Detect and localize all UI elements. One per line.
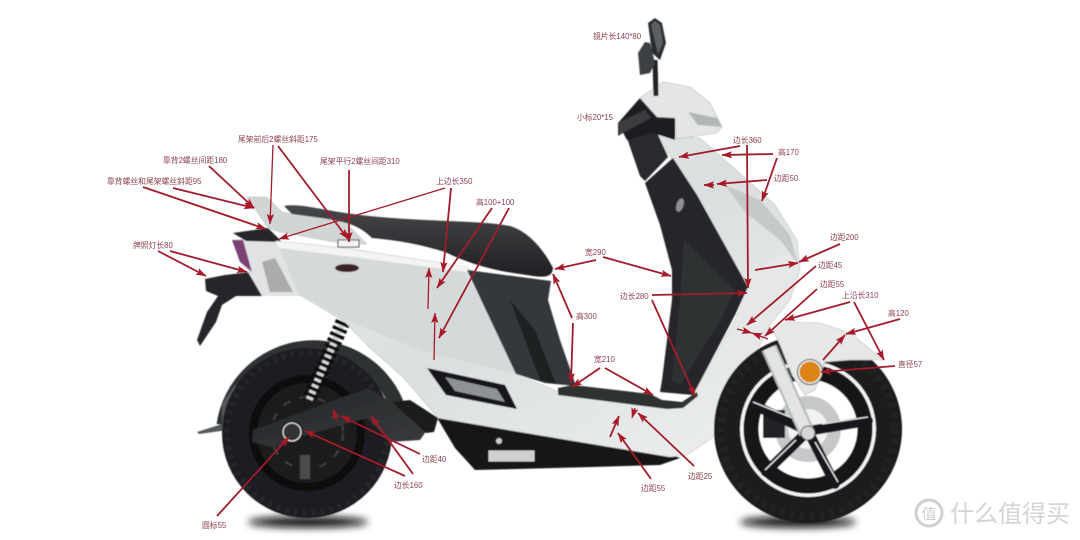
front shield shading <box>724 250 798 400</box>
handlebar head cover <box>640 82 722 139</box>
callout: 边距45 <box>737 261 843 333</box>
swing arm badge <box>281 421 303 443</box>
callout: 边距55 bottom <box>610 416 666 493</box>
callout: 边距55 right <box>752 280 845 339</box>
swing arm <box>252 388 427 448</box>
scooter illustration <box>197 18 902 528</box>
main white body <box>277 135 800 457</box>
callout: 边长160: 边长160 <box>394 480 423 490</box>
rear grab rail <box>247 197 367 244</box>
callout: 高100+100 <box>428 197 515 360</box>
callout: 高100+100: 高100+100 <box>476 197 515 207</box>
upper glove box <box>627 128 668 181</box>
callout: 边距45: 边距45 <box>818 261 843 270</box>
callout: 尾架平行2螺丝间距310: 尾架平行2螺丝间距310 <box>320 156 400 166</box>
callout: 上沿长310: 上沿长310 <box>842 290 879 300</box>
watermark: 值 <box>921 506 937 523</box>
callout: 高300: 高300 <box>576 311 597 321</box>
callout: 圆标55: 圆标55 <box>202 520 227 530</box>
orange reflector <box>798 360 822 384</box>
callout: 镜片长140*80: 镜片长140*80 <box>593 31 642 41</box>
callout: 边距200 <box>755 233 859 270</box>
callout: 宽290: 宽290 <box>585 247 606 257</box>
motor cover <box>392 400 438 433</box>
callout: 高170 <box>722 147 799 201</box>
callout: 牌照灯长80 <box>133 240 247 276</box>
body highlight strip <box>275 241 468 272</box>
callout: 边长160 <box>305 416 423 490</box>
mirrors <box>638 18 666 96</box>
callout: 尾架前后2螺丝斜距175 <box>238 134 348 239</box>
lower black underbody <box>436 416 680 470</box>
rack badge <box>338 240 359 247</box>
callout: 边长360: 边长360 <box>733 135 762 145</box>
callout: 上沿长310 <box>785 290 884 360</box>
callout: 上边长350 <box>279 176 473 272</box>
callout: 高120: 高120 <box>888 308 909 318</box>
dark under-seat strut <box>467 270 576 386</box>
leg shield dark panel <box>645 158 748 395</box>
callout: 上边长350: 上边长350 <box>436 176 473 186</box>
headlight strip <box>688 112 722 127</box>
callout: 直径57 <box>821 359 922 372</box>
callout: 高170: 高170 <box>778 147 799 157</box>
seat <box>284 205 553 277</box>
callout: 边距25 <box>632 408 713 481</box>
callout: 小标20*15: 小标20*15 <box>577 112 614 122</box>
callout: 边长280 <box>620 291 747 396</box>
callout: 宽290 <box>555 247 671 276</box>
bolt <box>496 438 502 444</box>
callout: 直径57: 直径57 <box>898 359 922 369</box>
callout: 高300 <box>553 274 597 383</box>
callout: 边距40: 边距40 <box>422 455 447 464</box>
rear body vent <box>427 368 517 409</box>
front wheel <box>714 335 902 523</box>
callout: 边长280: 边长280 <box>620 291 649 301</box>
rear wheel <box>222 348 392 518</box>
watermark: 什么值得买 <box>950 501 1070 528</box>
foot board <box>558 385 698 409</box>
model logo <box>335 264 359 272</box>
front fender <box>773 322 883 395</box>
callout: 靠背2螺丝间距180: 靠背2螺丝间距180 <box>163 155 228 165</box>
callout: 尾架前后2螺丝斜距175: 尾架前后2螺丝斜距175 <box>238 134 318 144</box>
callout: 牌照灯长80: 牌照灯长80 <box>133 240 174 250</box>
front fork <box>769 348 815 440</box>
data plate <box>488 450 535 462</box>
callout: 边距50: 边距50 <box>774 174 799 183</box>
callout: 边距25: 边距25 <box>688 472 713 481</box>
callout: 靠背螺丝和尾架螺丝斜距95: 靠背螺丝和尾架螺丝斜距95 <box>107 176 202 186</box>
callout: 宽210: 宽210 <box>594 354 615 364</box>
callout: 靠背螺丝和尾架螺丝斜距95 <box>107 176 266 229</box>
callout: 边长360 <box>679 135 762 288</box>
cockpit <box>618 98 675 140</box>
tail light <box>232 228 302 296</box>
callout: 边距55 right: 边距55 <box>820 280 845 289</box>
callout: 边距55 bottom: 边距55 <box>641 484 666 493</box>
front light lens <box>725 185 798 264</box>
callout: 宽210 <box>572 354 653 395</box>
rear shock absorber <box>309 322 343 400</box>
rear mudguard and tail hugger <box>197 272 398 434</box>
callout: 尾架平行2螺丝间距310 <box>320 156 400 242</box>
handlebar grip <box>618 110 651 136</box>
ground shadows <box>248 516 856 528</box>
shield inner lighter panel <box>672 240 735 385</box>
callout: 边距200: 边距200 <box>830 233 859 242</box>
strut inner channel <box>510 300 556 384</box>
callout: 圆标55 <box>202 437 289 530</box>
callout: 边距50 <box>704 174 799 185</box>
callout: 边距40 <box>333 409 447 464</box>
round key lock <box>675 197 685 213</box>
rear side panel shading <box>277 243 525 376</box>
callout: 高120 <box>823 308 909 360</box>
callout: 靠背2螺丝间距180 <box>163 155 254 208</box>
